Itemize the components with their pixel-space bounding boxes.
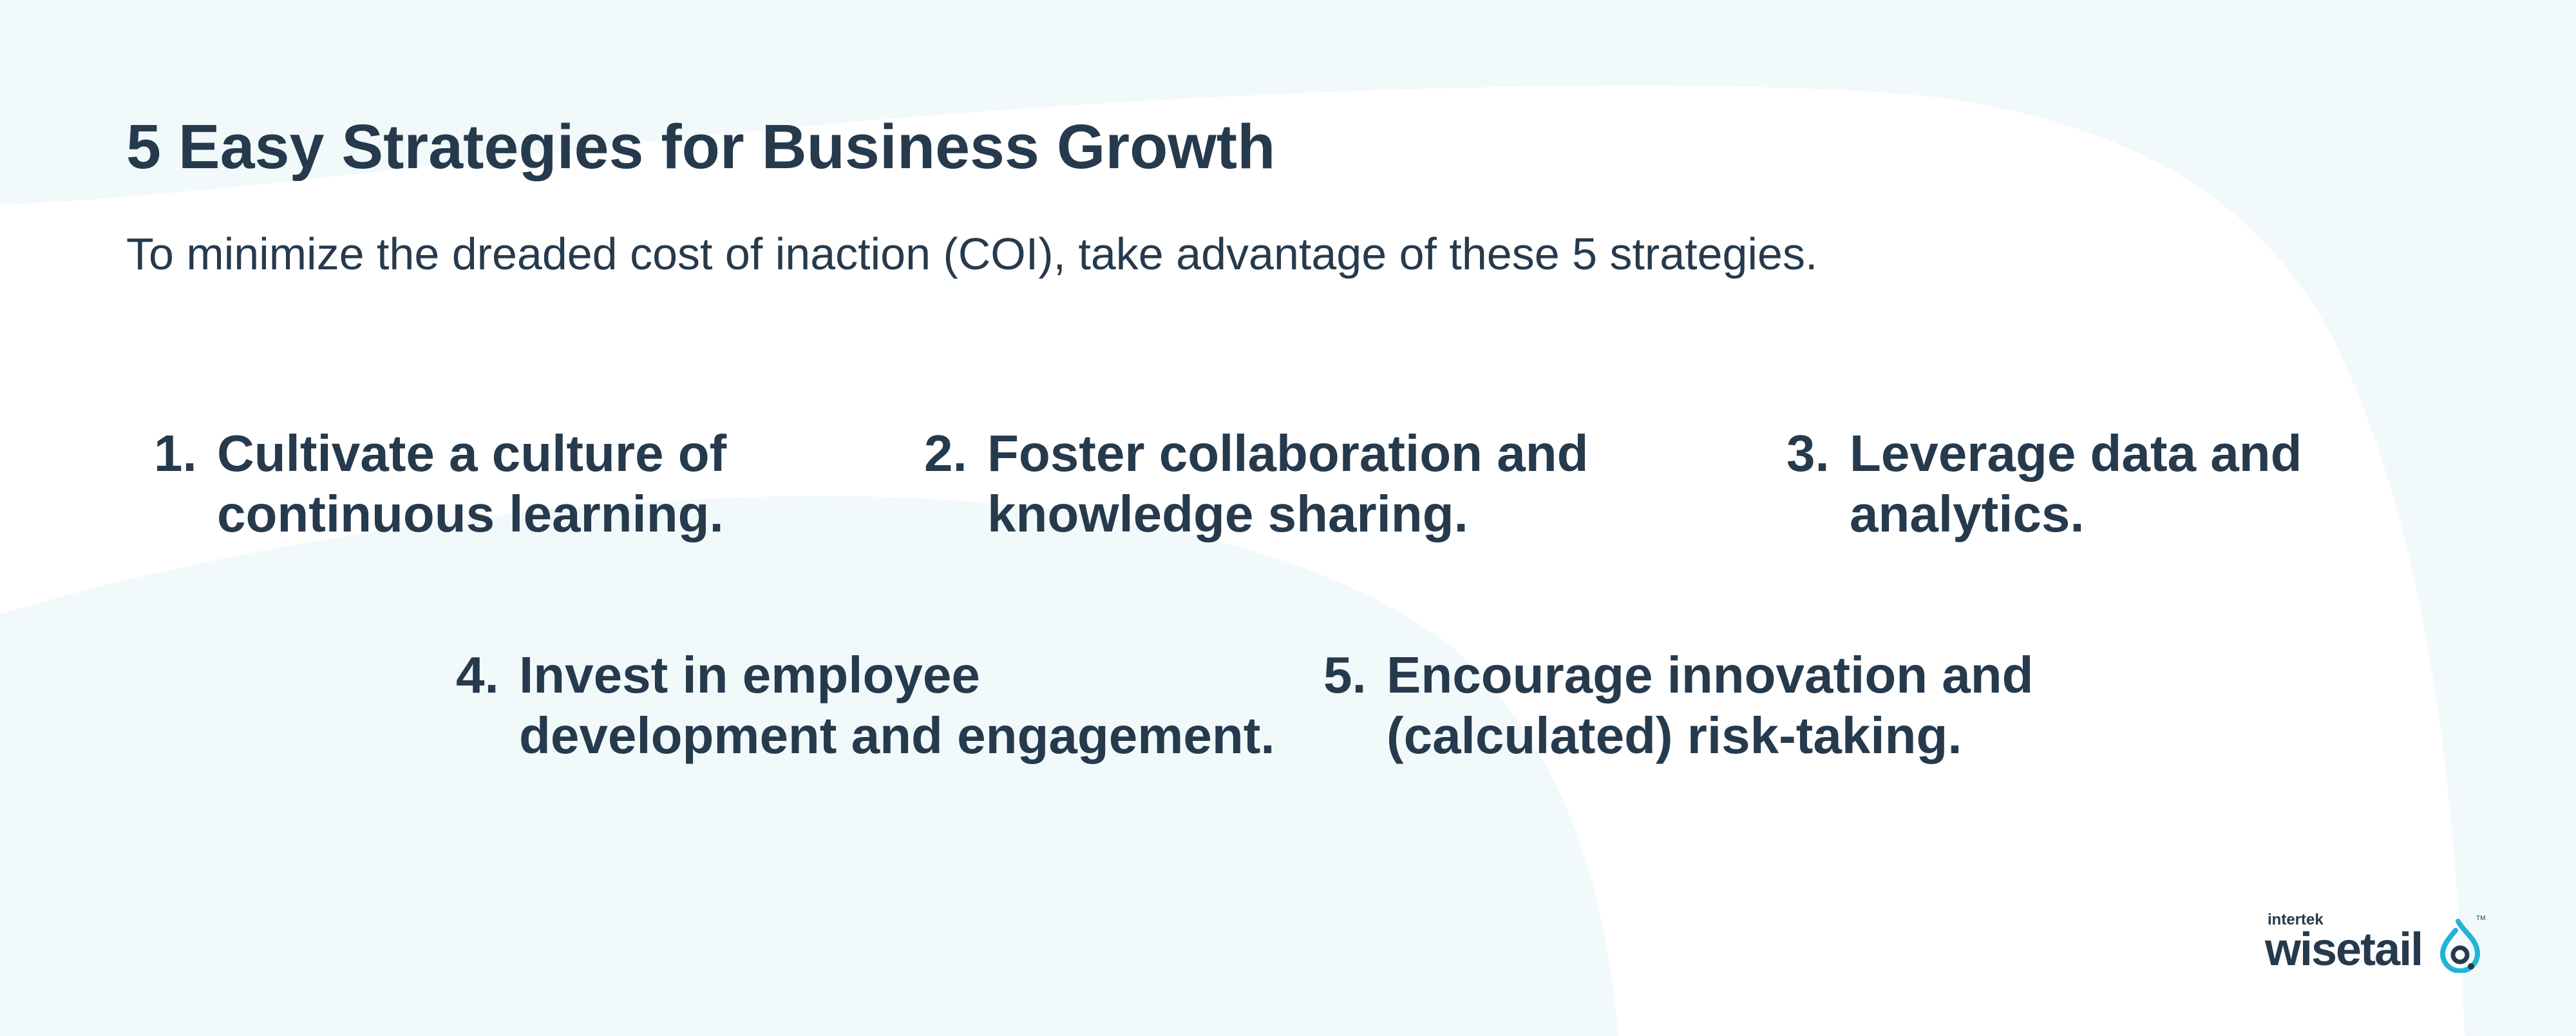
logo: intertek wisetail: wisetail — [2265, 924, 2422, 975]
text: 4. — [456, 646, 499, 704]
text: 3. — [1786, 425, 1830, 482]
strategy 5: (calculated) risk-taking. — [1387, 707, 1962, 764]
logo: intertek wisetail: intertek — [2268, 911, 2324, 928]
strategy 2: knowledge sharing. — [987, 485, 1468, 542]
text: 5. — [1323, 646, 1367, 704]
strategy 1: continuous learning. — [217, 485, 724, 542]
strategy 5 — [1323, 646, 2034, 764]
strategy 3 — [1786, 425, 2302, 542]
logo: intertek wisetail — [2264, 911, 2485, 975]
strategy 3: Leverage data and — [1850, 425, 2302, 482]
text: 2. — [924, 425, 967, 482]
text: 1. — [154, 425, 197, 482]
title: 5 Easy Strategies for Business Growth — [126, 111, 1275, 182]
strategy 4: development and engagement. — [519, 707, 1275, 764]
strategy 2: Foster collaboration and — [987, 425, 1588, 482]
strategy 2 — [924, 425, 1588, 542]
strategy 4 — [456, 646, 1275, 764]
strategy 3: analytics. — [1850, 485, 2085, 542]
subtitle: To minimize the dreaded cost of inaction (COI), take advantage of these 5 strategies. — [126, 229, 1817, 279]
strategy 1: Cultivate a culture of — [217, 425, 726, 482]
strategy 5: Encourage innovation and — [1387, 646, 2034, 704]
strategy 4: Invest in employee — [519, 646, 980, 704]
logo: intertek wisetail: TM — [2476, 915, 2485, 922]
strategy 1 — [154, 425, 726, 542]
